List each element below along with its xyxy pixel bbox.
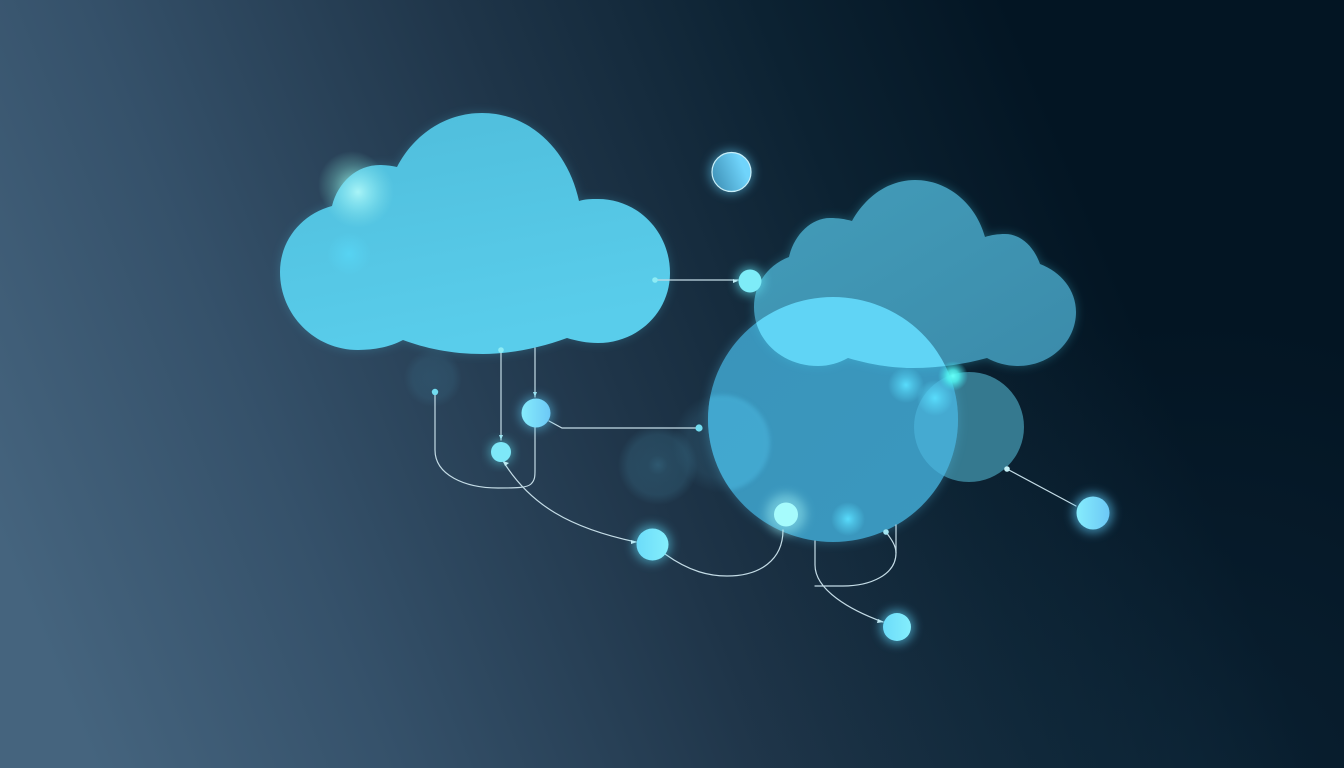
- node: below left cloud, large: [519, 396, 553, 430]
- node: floating ring circle: [709, 150, 753, 194]
- small teal circle behind big circle: [914, 372, 1024, 482]
- node: bottom: [880, 610, 914, 644]
- node: below left cloud, small: [489, 440, 513, 464]
- big translucent circle: [703, 318, 961, 548]
- node: right of left cloud: [736, 267, 764, 295]
- faint ghost circles: [404, 349, 772, 505]
- right cloud: [750, 175, 1081, 371]
- connector lines: [435, 280, 1076, 622]
- node: lower centre: [633, 525, 671, 563]
- node: lower right: [1073, 493, 1113, 533]
- glow spots on big circle: [831, 361, 968, 536]
- connector end dots and arrowheads: [432, 277, 1010, 623]
- left cloud: [280, 113, 670, 354]
- node: bottom edge of big circle: [766, 494, 806, 534]
